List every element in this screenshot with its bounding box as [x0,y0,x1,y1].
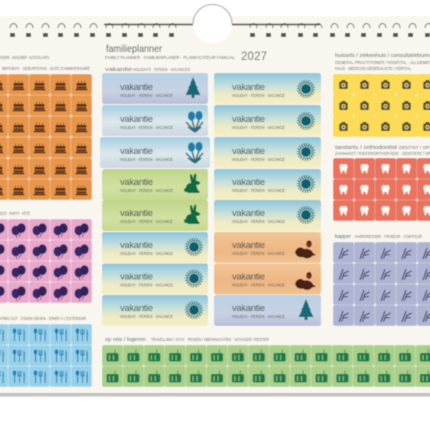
holiday label column 1 [100,73,210,326]
label: sun [102,295,208,326]
header: dentist [335,145,430,156]
label: sun: vakantie [232,82,265,93]
header: hairdresser [335,234,422,240]
label: sun: vakantie [232,146,265,157]
sticker grid: doctor cameras [333,74,430,137]
label: sun: vakantie [232,208,265,219]
header: holidays: HOLIDAYS · FERIEN · VACANCES [133,67,190,72]
header: eating out: EATING OUT · ESSEN GEHEN · DÎNER À L'EXTÉRIEUR [0,316,86,321]
label: autumn leaves [214,264,321,294]
header: doctor: HAUS · MÉDECIN GÉNÉRALISTE / HÔPITAL [335,66,411,71]
label: sun: HOLIDAY · FERIEN · VACANCE [232,157,285,162]
header: holidays [105,67,190,73]
label: sun [214,200,321,231]
label: rabbit: HOLIDAY · FERIEN · VACANCE [120,188,173,193]
label: sun [214,137,321,168]
holiday label column 2 [214,73,321,326]
label: sun: HOLIDAY · FERIEN · VACANCE [120,314,173,319]
label: tree: HOLIDAY · FERIEN · VACANCE [232,314,285,319]
label: sun: HOLIDAY · FERIEN · VACANCE [232,93,285,98]
label: tulip: vakantie [120,114,153,125]
label: autumn leaves: HOLIDAY · FERIEN · VACANCE [232,251,285,256]
label: tulip [102,105,208,136]
sticker grid: party balloons [0,219,92,303]
label: autumn leaves [214,232,321,263]
label: autumn leaves: HOLIDAY · FERIEN · VACANCE [232,282,285,288]
label: sun [214,105,321,136]
sticker grid: dentist teeth [333,158,430,221]
paper shadow [0,392,430,396]
label: sun: vakantie [120,303,153,314]
label: sun [214,73,321,104]
label: tree: vakantie [120,82,153,93]
label: tree: HOLIDAY · FERIEN · VACANCE [120,93,173,98]
label: tulip [100,137,210,168]
header: dentist: tandarts / orthodontist [335,145,398,151]
header: holidays: vakantie [105,67,132,73]
title: familieplanner: familieplanner [106,44,163,55]
sticker grid: hairdresser [333,242,430,326]
sticker grid: birthday cakes [0,74,92,200]
label: sun: vakantie [232,177,265,188]
label: sun: vakantie [120,272,153,282]
sticker grid: eating out cutlery [0,324,92,387]
label: sun: HOLIDAY · FERIEN · VACANCE [120,282,173,288]
label: tulip: HOLIDAY · FERIEN · VACANCE [120,157,173,162]
label: tulip: HOLIDAY · FERIEN · VACANCE [120,125,173,130]
label: tree [102,73,208,104]
label: sun [102,264,208,294]
label: tree [214,295,321,326]
year: 2027 [241,51,267,63]
header: doctor [335,53,430,71]
label: sun: HOLIDAY · FERIEN · VACANCE [232,219,285,224]
label: sun: vakantie [120,240,153,251]
label: sun: vakantie [232,114,265,125]
label: sun: HOLIDAY · FERIEN · VACANCE [232,188,285,193]
label: rabbit: HOLIDAY · FERIEN · VACANCE [120,219,173,224]
label: rabbit [102,200,208,231]
label: tree: vakantie [232,303,265,314]
label: sun [214,169,321,200]
label: sun: HOLIDAY · FERIEN · VACANCE [120,251,173,256]
label: sun: HOLIDAY · FERIEN · VACANCE [232,125,285,130]
label: rabbit: vakantie [120,177,153,188]
label: autumn leaves: vakantie [232,272,265,282]
header: hairdresser: kapper [335,234,351,240]
binding holes [10,33,430,37]
hanging hole [193,4,232,44]
header: travelling [105,337,269,343]
label: autumn leaves: vakantie [232,240,265,251]
header: birthday: BIRTHDAY · GEBURTSTAG · DATE D'ANNIVERSAIRE [2,66,90,71]
header: travelling: op reis / logeren [105,337,146,343]
header: travelling: TRAVELLING / STAY · REISEN / ÜBERNACHTEN · VOYAGER / RESTER [151,337,269,342]
label: rabbit: vakantie [120,208,153,219]
label: tulip: vakantie [120,146,153,157]
label: rabbit [102,169,208,200]
subtitle: family planner: FAMILY PLANNER · FAMILIENPLANER · PLANIFICATEUR FAMILIAL [105,55,236,60]
wire binding [10,24,430,28]
sticker grid: travel bags [102,345,430,387]
label: sun [102,232,208,263]
